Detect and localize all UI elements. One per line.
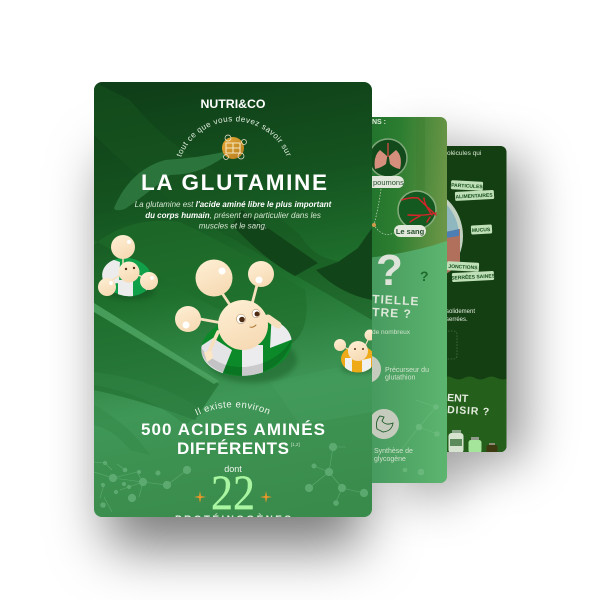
tag: mucus: MUCUS [472, 227, 491, 234]
lower section: how to choose: DISIR ? [447, 404, 490, 418]
decorative molecule [401, 400, 440, 475]
icon: glutamine molecule [222, 135, 246, 160]
curved tagline: tout ce que vous devez savoir sur [176, 116, 291, 156]
faint top shapes [416, 117, 425, 207]
heading: 500 acides aminés différents [141, 420, 325, 458]
label: synthèse de glycogène [374, 448, 413, 463]
heading: essentielle [372, 294, 418, 318]
tag: particules alimentaires: PARTICULES [451, 183, 484, 190]
character: left molecule on green ring [98, 235, 158, 300]
connector dot [372, 223, 376, 227]
back card intro text: olécules qui [447, 150, 481, 157]
dashed note box [448, 330, 458, 360]
tag: particules alimentaires: ALIMENTAIRES [455, 192, 493, 200]
label: poumons: poumons [373, 178, 404, 187]
label: le sang [394, 225, 426, 237]
background swooshes [94, 82, 372, 455]
supplement bottles [448, 430, 498, 453]
icon: blood vessels circle [398, 191, 436, 229]
lower section background [372, 241, 447, 483]
reference superscript: [1,2] [291, 442, 300, 447]
tag: jonctions serrées saines: SERRÉES SAINES [451, 271, 496, 282]
curved line: il existe environ: Il existe environ [194, 402, 270, 416]
label: dont: dont [224, 464, 242, 474]
icon: muscle circle [369, 409, 399, 439]
intro paragraph: muscles et le sang. [199, 222, 267, 230]
label: précurseur du glutathion: Précurseur du [385, 367, 429, 374]
intro paragraph: La glutamine est l'acide aminé libre le plus important [135, 200, 332, 209]
title: LA GLUTAMINE [141, 170, 327, 195]
tag: jonctions serrées saines [447, 261, 496, 282]
middle card: rôles de la glutamine [372, 117, 447, 483]
tag: jonctions serrées saines: JONCTIONS [448, 264, 478, 271]
label: précurseur du glutathion: glutathion [385, 374, 415, 382]
intestine cross-section diagram [447, 200, 463, 274]
molecule pattern left [94, 461, 191, 512]
big number 22: 22 [211, 464, 255, 520]
heading: essentielle: TIELLE [372, 292, 420, 308]
label: précurseur du glutathion [385, 367, 429, 382]
body text: de nombreux [372, 329, 411, 336]
big question mark: ? [376, 246, 403, 295]
sparkle left [194, 491, 206, 503]
character: main molecule on green ring [175, 260, 297, 385]
tag: particules alimentaires [451, 180, 494, 201]
label: le sang: Le sang [396, 227, 425, 236]
label: synthèse de glycogène: Synthèse de [374, 448, 413, 455]
heading: essentielle: TRE ? [372, 305, 412, 321]
back card body text: solidement [446, 309, 475, 315]
cut-off line: protéinogènes: PROTÉINOGÈNES [175, 512, 291, 526]
logo: NUTRI&CO [200, 99, 266, 111]
heading: 500 acides aminés différents: DIFFÉRENTS [177, 439, 289, 458]
heading: 500 acides aminés différents: 500 ACIDES AMINÉS [141, 420, 325, 439]
back card body text [447, 308, 475, 321]
dashed connectors [374, 189, 394, 234]
front card [94, 82, 372, 517]
back card body text: serrées. [446, 317, 468, 323]
heading fragment: NS : [372, 119, 386, 126]
intro paragraph: du corps humain, présent en particulier dans les [145, 211, 321, 220]
sparkle right [260, 491, 272, 503]
small question mark: ? [420, 268, 429, 284]
back card: gut barrier page [447, 146, 506, 452]
label: synthèse de glycogène: glycogène [374, 456, 406, 463]
lower section: how to choose: ENT [447, 392, 469, 405]
icon: lungs circle [369, 139, 407, 177]
character: right molecule on orange ring [334, 330, 376, 374]
molecule pattern right [305, 443, 368, 506]
tag: mucus [471, 224, 492, 235]
intro paragraph [135, 200, 332, 230]
icon: glutathion circle [372, 356, 381, 382]
lower section: how to choose [447, 376, 506, 452]
